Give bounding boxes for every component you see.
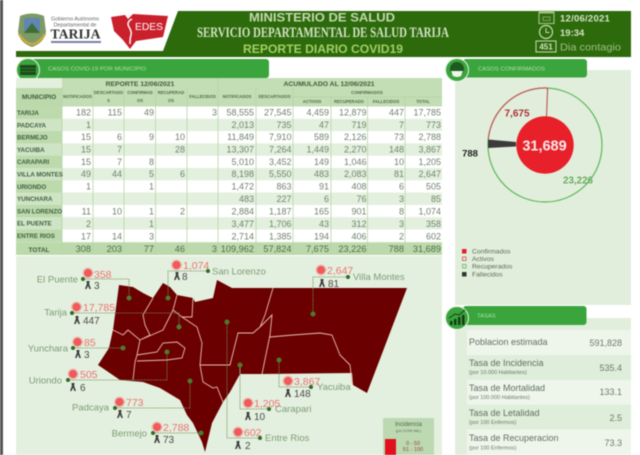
accumulated numbers: 76 — [356, 194, 366, 204]
row: tasa de letalidad: Tasa de Letalidad — [469, 408, 540, 418]
accumulated numbers: 43 — [319, 219, 329, 229]
accumulated numbers: 406 — [351, 232, 366, 242]
label: San Lorenzo — [166, 260, 266, 300]
logo: Gobierno Autonomo de Tarija — [18, 14, 101, 47]
daily report numbers: 3 — [212, 108, 217, 118]
municipality names: YACUIBA — [17, 147, 45, 154]
label: San Lorenzo: 8 — [182, 272, 188, 283]
donut chart — [462, 88, 602, 202]
accumulated numbers: 11,849 — [227, 132, 254, 142]
panel: casos por municipio heading: CASOS COVID-19 POR MUNICIPIO — [48, 66, 146, 72]
accumulated numbers: 58,555 — [226, 108, 254, 118]
panel: casos por municipio heading — [16, 58, 269, 82]
daily report numbers: 9 — [149, 132, 154, 142]
accumulated numbers: 149 — [314, 157, 329, 167]
chart legend: Confirmados — [472, 248, 511, 256]
accumulated numbers: 408 — [351, 182, 366, 192]
label: Bermejo: Bermejo — [112, 428, 147, 440]
accumulated numbers: 81 — [394, 169, 404, 179]
accumulated numbers: 863 — [276, 182, 292, 192]
label: Tarja: 17,785 — [83, 302, 115, 314]
daily report numbers: 10 — [175, 132, 185, 142]
map of Tarija department — [98, 280, 407, 452]
logo: Gobierno Autonomo de Tarija: Departamental de — [54, 22, 96, 28]
accumulated numbers: 2,714 — [231, 232, 254, 242]
daily report numbers: 1 — [149, 219, 154, 229]
accumulated numbers: 91 — [319, 182, 329, 192]
donut chart: 31,689 — [522, 138, 567, 154]
heading: tasas: TASAS — [477, 314, 496, 320]
donut chart: 788 — [462, 148, 478, 160]
row: tasa de letalidad: (por 100 Enfermos) — [469, 420, 517, 426]
totals row: 7,675 — [306, 244, 329, 254]
row: poblacion estimada — [467, 330, 631, 355]
accumulated numbers: 3 — [399, 194, 404, 204]
table column headings: CONFIRMADOS — [351, 90, 383, 95]
row: poblacion estimada: 591,828 — [589, 338, 622, 348]
legend: incidencia: (por 10.000 Hab.) — [396, 429, 421, 433]
municipality names — [17, 110, 63, 254]
municipality names: URIONDO — [17, 184, 46, 191]
label: Padcaya: 773 — [126, 397, 144, 409]
label: Padcaya — [72, 378, 192, 421]
accumulated numbers: 47 — [319, 120, 329, 130]
accumulated numbers: 483 — [239, 194, 254, 204]
row: tasa de mortalidad: Tasa de Mortalidad — [469, 383, 545, 393]
totals row: 31,689 — [413, 244, 441, 254]
daily report numbers: 7 — [117, 157, 122, 167]
label: Carapari: 10 — [254, 412, 266, 423]
daily report numbers: 1 — [149, 206, 154, 216]
daily report numbers: 15 — [81, 157, 91, 167]
label: Yacuiba: Yacuiba — [317, 382, 351, 393]
municipality names: ENTRE RIOS — [17, 233, 55, 240]
row: tasa de incidencia: (por 10.000 Habitantes) — [469, 370, 527, 376]
row: tasa de recuperacion — [467, 430, 631, 455]
daily report numbers: 6 — [117, 132, 122, 142]
accumulated numbers: 27,545 — [264, 108, 292, 118]
accumulated numbers: 735 — [276, 120, 292, 130]
logo: Gobierno Autonomo de Tarija: Gobierno Autónomo — [51, 16, 99, 22]
panel: casos confirmados — [446, 58, 631, 305]
accumulated numbers: 6 — [399, 182, 404, 192]
accumulated numbers: 2,126 — [344, 132, 366, 142]
accumulated numbers: 1,385 — [269, 232, 292, 242]
table column headings: DESCARTADO — [94, 90, 124, 95]
date, time and contagion day: 12/06/2021 — [560, 14, 611, 24]
accumulated numbers: 719 — [351, 120, 366, 130]
accumulated numbers: 7,910 — [269, 132, 292, 142]
accumulated numbers: 8 — [399, 206, 404, 216]
table group headings: ACUMULADO AL 12/06/2021 — [283, 81, 375, 88]
title block — [197, 12, 449, 56]
label: Tarja: 447 — [83, 316, 100, 327]
municipality names: TARIJA — [17, 110, 39, 117]
label: Padcaya: 7 — [126, 410, 132, 421]
accumulated numbers: 901 — [351, 206, 366, 216]
daily report numbers: 5 — [149, 169, 154, 179]
donut chart: 23,226 — [563, 176, 594, 186]
label: Carapari — [238, 362, 311, 423]
accumulated numbers: 358 — [426, 219, 441, 229]
daily report numbers: 115 — [108, 108, 122, 118]
municipality names: BERMEJO — [17, 135, 48, 142]
row: tasa de mortalidad — [467, 380, 631, 404]
label: Tarja: Tarija — [44, 308, 68, 318]
accumulated numbers: 773 — [426, 120, 441, 130]
label: Entre Rios: 2 — [245, 441, 251, 452]
totals row: 57,824 — [263, 244, 292, 254]
row: tasa de letalidad — [467, 404, 631, 430]
accumulated numbers: 5,010 — [231, 157, 254, 167]
label: Uriondo: 6 — [80, 383, 86, 394]
table column headings: OS — [168, 98, 174, 103]
legend: incidencia: Incidencia — [395, 422, 423, 428]
totals row: 203 — [107, 244, 122, 254]
accumulated numbers: 505 — [426, 182, 441, 192]
panel: tabla de municipios — [16, 78, 442, 255]
label: Tarja — [44, 302, 182, 330]
label: Entre Rios: Entre Rios — [265, 433, 310, 444]
label: Yunchara: 85 — [84, 337, 96, 349]
totals row: 77 — [144, 244, 154, 254]
chart legend: Activos — [472, 256, 495, 263]
totals row: 109,962 — [221, 244, 254, 254]
row: tasa de incidencia — [467, 355, 631, 380]
date, time and contagion day: 451 — [539, 42, 553, 52]
table column headings: CONFIRMAD — [127, 90, 153, 95]
daily report numbers: 49 — [81, 169, 91, 179]
municipality names: EL PUENTE — [17, 221, 52, 228]
label: Bermejo — [112, 422, 204, 446]
date, time and contagion day — [536, 10, 621, 54]
accumulated numbers: 3,452 — [269, 157, 292, 167]
label: Uriondo: Uriondo — [29, 376, 62, 386]
daily report numbers: 6 — [180, 169, 185, 179]
label: El Puente — [37, 268, 132, 300]
panel: mapa de incidencia — [16, 256, 442, 455]
accumulated numbers: 165 — [314, 206, 329, 216]
label: Yacuiba — [276, 358, 351, 400]
accumulated numbers: 1,449 — [306, 144, 329, 154]
accumulated numbers: 3,867 — [418, 144, 441, 154]
table column headings: TOTAL — [416, 99, 430, 104]
accumulated numbers: 148 — [389, 144, 404, 154]
table column headings: NOTIFICADOS — [223, 94, 252, 99]
chart legend — [462, 248, 513, 278]
accumulated numbers: 10 — [394, 157, 404, 167]
row: tasa de recuperacion: 73.3 — [604, 438, 622, 448]
label: San Lorenzo: San Lorenzo — [212, 266, 266, 278]
logo: SEDES — [111, 14, 168, 49]
label: Bermejo: 2,788 — [163, 422, 189, 434]
table column headings: DESCARTADOS — [258, 94, 291, 99]
accumulated numbers: 73 — [394, 132, 404, 142]
table column headings: S — [107, 98, 110, 103]
daily report numbers: 28 — [175, 144, 185, 154]
label: Padcaya: Padcaya — [72, 402, 110, 414]
chart legend: Recuperados — [472, 264, 513, 270]
row: tasa de mortalidad: (por 100.000 Habitantes) — [469, 395, 530, 401]
accumulated numbers: 1,046 — [344, 157, 366, 167]
daily report numbers: 2 — [86, 219, 91, 229]
daily report numbers: 15 — [81, 132, 91, 142]
row: tasa de incidencia: 535.4 — [599, 363, 622, 373]
accumulated numbers: 17,785 — [413, 108, 441, 118]
row: tasa de mortalidad: 133.1 — [599, 387, 622, 397]
label: Entre Rios — [224, 320, 310, 452]
logo: SEDES: EDES — [135, 21, 163, 33]
chart legend: Fallecidos — [472, 272, 503, 278]
totals row: 46 — [175, 244, 185, 254]
totals row — [76, 244, 441, 254]
donut chart: 7,675 — [504, 108, 530, 120]
daily report numbers: 44 — [112, 169, 122, 179]
label: Uriondo: 505 — [80, 369, 98, 381]
accumulated numbers: 2 — [399, 232, 404, 242]
row: tasa de recuperacion: (por 100 Enfermos) — [469, 446, 517, 452]
accumulated numbers: 2,647 — [418, 169, 441, 179]
accumulated numbers: 4,459 — [306, 108, 329, 118]
accumulated numbers: 1,706 — [269, 219, 292, 229]
accumulated numbers: 2,884 — [231, 206, 254, 216]
table column headings — [63, 90, 430, 104]
accumulated numbers: 2,788 — [418, 132, 441, 142]
table group headings — [22, 81, 375, 101]
title block: MINISTERIO DE SALUD — [249, 12, 395, 24]
label: Yacuiba: 3,867 — [294, 376, 320, 388]
totals row: 3 — [212, 244, 217, 254]
accumulated numbers: 1,074 — [418, 206, 441, 216]
accumulated numbers: 227 — [276, 194, 292, 204]
legend: incidencia: 51 - 100 — [403, 447, 423, 453]
daily report numbers: 1 — [86, 182, 91, 192]
daily report numbers: 2 — [180, 206, 185, 216]
daily report numbers: 15 — [81, 144, 91, 154]
accumulated numbers: 447 — [389, 108, 404, 118]
label: Villa Montes: 81 — [328, 279, 340, 290]
legend: incidencia — [383, 418, 434, 455]
accumulated numbers: 312 — [351, 219, 366, 229]
label: Bermejo: 73 — [163, 435, 175, 446]
accumulated numbers: 1,205 — [418, 157, 441, 167]
label: Carapari: Carapari — [275, 404, 311, 415]
date, time and contagion day: 19:34 — [560, 28, 585, 39]
table column headings: FALLECIDOS — [189, 94, 216, 99]
municipality names: SAN LORENZO — [17, 208, 62, 215]
daily report numbers: 8 — [149, 157, 154, 167]
accumulated numbers: 3,477 — [231, 219, 254, 229]
label: Villa Montes — [310, 265, 405, 316]
label: Entre Rios: 602 — [244, 427, 262, 439]
row: poblacion estimada: Poblacion estimada — [469, 337, 548, 347]
table column headings: OS — [137, 98, 143, 103]
daily report numbers — [76, 108, 217, 242]
title block: SERVICIO DEPARTAMENTAL DE SALUD TARIJA — [197, 25, 449, 41]
table column headings: ACTIVOS — [303, 99, 322, 104]
daily report numbers: 17 — [81, 232, 91, 242]
daily report numbers: 7 — [117, 144, 122, 154]
table column headings: FALLECIDOS — [373, 99, 399, 104]
accumulated numbers: 1,187 — [269, 206, 292, 216]
label: Yunchara — [28, 337, 126, 361]
accumulated numbers: 85 — [431, 194, 441, 204]
accumulated numbers: 7 — [399, 120, 404, 130]
heading: casos confirmados — [446, 58, 587, 82]
daily report numbers: 182 — [76, 108, 91, 118]
heading: tasas — [446, 306, 586, 330]
row: tasa de recuperacion: Tasa de Recuperacion — [469, 433, 559, 443]
panel: tasas — [446, 306, 631, 455]
daily report numbers: 49 — [144, 108, 154, 118]
label: Villa Montes: Villa Montes — [353, 272, 405, 283]
label: Yunchara: 3 — [84, 350, 90, 361]
table column headings: RECUPERADO — [334, 99, 365, 104]
row: tasa de letalidad: 2.5 — [609, 413, 622, 423]
daily report numbers: 1 — [86, 120, 91, 130]
label: El Puente: El Puente — [37, 274, 78, 286]
table rows background — [16, 78, 442, 255]
daily report numbers: 10 — [112, 206, 122, 216]
totals row: 308 — [76, 244, 91, 254]
label: El Puente: 3 — [94, 281, 100, 292]
accumulated numbers: 589 — [314, 132, 329, 142]
heading: casos confirmados: CASOS CONFIRMADOS — [478, 66, 545, 72]
label: San Lorenzo: 1,074 — [183, 260, 209, 272]
municipality names: CARAPARI — [17, 159, 49, 166]
totals row: 23,226 — [338, 244, 366, 254]
municipality names: TOTAL — [28, 247, 50, 254]
label: Uriondo — [29, 350, 170, 394]
accumulated numbers: 602 — [426, 232, 441, 242]
table group headings: REPORTE 12/06/2021 — [106, 81, 175, 88]
accumulated numbers: 3 — [399, 219, 404, 229]
municipality names: YUNCHARA — [17, 196, 53, 203]
daily report numbers: 3 — [149, 232, 154, 242]
accumulated numbers: 5,550 — [269, 169, 292, 179]
label: Yacuiba: 148 — [294, 389, 311, 400]
municipality names: PADCAYA — [17, 122, 47, 129]
daily report numbers: 1 — [149, 182, 154, 192]
table column headings: RECUPERAD — [158, 90, 184, 95]
date, time and contagion day: Dia contagio — [560, 42, 621, 54]
title block: REPORTE DIARIO COVID19 — [243, 44, 403, 56]
label: El Puente: 358 — [94, 269, 112, 281]
accumulated numbers — [226, 108, 441, 242]
header band — [16, 11, 631, 57]
logo: Gobierno Autonomo de Tarija: TARIJA — [50, 26, 101, 42]
accumulated numbers: 8,198 — [231, 169, 254, 179]
accumulated numbers: 483 — [314, 169, 329, 179]
municipality names: VILLA MONTES — [17, 172, 63, 178]
label: Yunchara: Yunchara — [28, 344, 69, 354]
label: Villa Montes: 2,647 — [327, 265, 353, 277]
accumulated numbers: 2,013 — [231, 120, 254, 130]
label: Carapari: 1,205 — [254, 398, 280, 410]
accumulated numbers: 6 — [324, 194, 329, 204]
accumulated numbers: 2,083 — [344, 169, 366, 179]
accumulated numbers: 194 — [314, 232, 329, 242]
totals row: 788 — [389, 244, 404, 254]
accumulated numbers: 1,472 — [231, 182, 254, 192]
legend: incidencia: 0 - 50 — [406, 441, 420, 447]
daily report numbers: 14 — [112, 232, 122, 242]
table column headings: NOTIFICADOS — [63, 94, 92, 99]
accumulated numbers: 12,879 — [339, 108, 366, 118]
table group headings: MUNICIPIO — [22, 94, 56, 101]
accumulated numbers: 13,307 — [226, 144, 254, 154]
row: tasa de incidencia: Tasa de Incidencia — [469, 358, 544, 368]
daily report numbers: 11 — [82, 206, 91, 216]
accumulated numbers: 2,270 — [344, 144, 366, 154]
accumulated numbers: 7,264 — [269, 144, 292, 154]
